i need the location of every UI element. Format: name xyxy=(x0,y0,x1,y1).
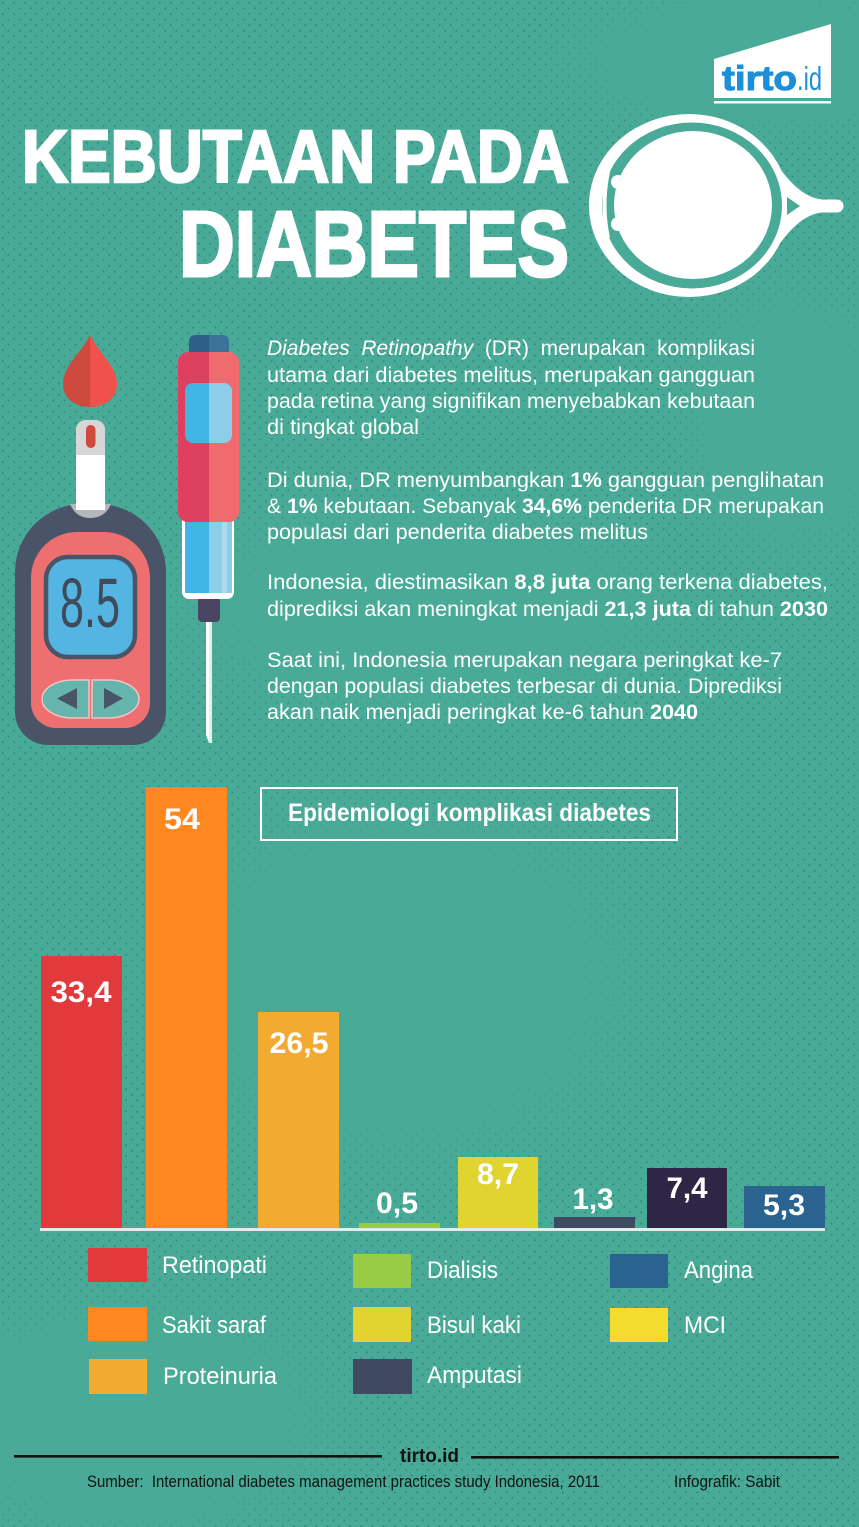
logo: tirto.id: .id xyxy=(797,60,822,97)
bar: Dialisis: 0,5 xyxy=(376,1187,418,1220)
bar: Amputasi xyxy=(554,1183,635,1229)
text: paragraph 1: Diabetes Retinopathy (DR) merupakan komplikasi xyxy=(267,336,755,360)
text: paragraph 2 xyxy=(267,468,824,544)
bar chart xyxy=(40,787,825,1231)
legend: Sakit saraf xyxy=(88,1307,266,1341)
bar: Proteinuria: 26,5 xyxy=(270,1027,328,1060)
source credit: Sumber: International diabetes management practices study Indonesia, 2011 xyxy=(87,1473,600,1491)
legend: Proteinuria xyxy=(89,1359,278,1394)
bar: Retinopati: 33,4 xyxy=(50,976,112,1009)
footer brand: tirto.id xyxy=(400,1446,459,1467)
bar: Sakit saraf: 54 xyxy=(164,803,200,836)
icon: insulin pen xyxy=(178,335,239,743)
footer xyxy=(14,1446,839,1491)
logo: tirto.id: tirto xyxy=(722,60,797,98)
text: paragraph 2: & 1% kebutaan. Sebanyak 34,6% penderita DR merupakan xyxy=(267,494,824,518)
legend: Bisul kaki: Bisul kaki xyxy=(427,1312,521,1339)
legend xyxy=(88,1248,754,1394)
icon: glucose meter xyxy=(15,495,166,745)
text: paragraph 2: populasi dari penderita diabetes melitus xyxy=(267,520,648,544)
author credit: Infografik: Sabit xyxy=(674,1473,780,1491)
bar: Angina xyxy=(744,1186,825,1229)
text: paragraph 4: Saat ini, Indonesia merupakan negara peringkat ke-7 xyxy=(267,648,782,672)
chart axis xyxy=(40,1228,825,1231)
text: paragraph 1: pada retina yang signifikan menyebabkan kebutaan xyxy=(267,389,755,413)
text: paragraph 4 xyxy=(267,648,782,724)
title: DIABETES xyxy=(179,192,569,296)
bar: Angina: 5,3 xyxy=(763,1189,805,1222)
bar: Proteinuria xyxy=(258,1012,339,1229)
bar: Amputasi: 1,3 xyxy=(572,1183,614,1216)
text: paragraph 4: dengan populasi diabetes terbesar di dunia. Diprediksi xyxy=(267,674,782,698)
legend: Dialisis xyxy=(353,1254,498,1288)
icon: test strip xyxy=(76,420,105,510)
legend: Retinopati xyxy=(88,1248,267,1282)
text: paragraph 3: diprediksi akan meningkat menjadi 21,3 juta di tahun 2030 xyxy=(267,597,828,621)
legend: Angina: Angina xyxy=(684,1257,754,1284)
icon: eye xyxy=(589,114,844,297)
legend: Angina xyxy=(610,1254,754,1288)
meter reading: 8.5 xyxy=(60,564,120,642)
chart heading: Epidemiologi komplikasi diabetes xyxy=(288,799,651,827)
legend: Amputasi xyxy=(353,1359,522,1394)
text: paragraph 2: Di dunia, DR menyumbangkan 1% gangguan penglihatan xyxy=(267,468,824,492)
legend: Proteinuria: Proteinuria xyxy=(163,1363,278,1390)
legend: Sakit saraf: Sakit saraf xyxy=(162,1312,266,1339)
text: paragraph 1 xyxy=(267,336,755,439)
text: paragraph 1: di tingkat global xyxy=(267,415,419,439)
title xyxy=(22,115,569,296)
chart heading xyxy=(261,788,677,840)
bar: Retinopati xyxy=(41,956,122,1229)
bar: MCI xyxy=(647,1168,727,1229)
logo: tirto.id xyxy=(714,24,831,104)
legend: Dialisis: Dialisis xyxy=(427,1257,498,1284)
legend: Retinopati: Retinopati xyxy=(162,1252,267,1279)
text: paragraph 3 xyxy=(267,570,828,621)
title: KEBUTAAN PADA xyxy=(22,115,569,198)
legend: Amputasi: Amputasi xyxy=(427,1362,522,1389)
icon: blood drop xyxy=(63,335,117,407)
text: paragraph 3: Indonesia, diestimasikan 8,8 juta orang terkena diabetes, xyxy=(267,570,828,594)
text: paragraph 1: utama dari diabetes melitus, merupakan gangguan xyxy=(267,363,755,387)
text: paragraph 4: akan naik menjadi peringkat ke-6 tahun 2040 xyxy=(267,700,698,724)
legend: MCI: MCI xyxy=(684,1312,726,1339)
bar: MCI: 7,4 xyxy=(666,1172,708,1205)
bar: Sakit saraf xyxy=(146,787,227,1229)
bar: Dialisis xyxy=(359,1187,440,1229)
legend: Bisul kaki xyxy=(353,1307,521,1342)
legend: MCI xyxy=(610,1308,726,1342)
bar: Bisul kaki: 8,7 xyxy=(477,1158,519,1191)
bar: Bisul kaki xyxy=(458,1157,538,1229)
